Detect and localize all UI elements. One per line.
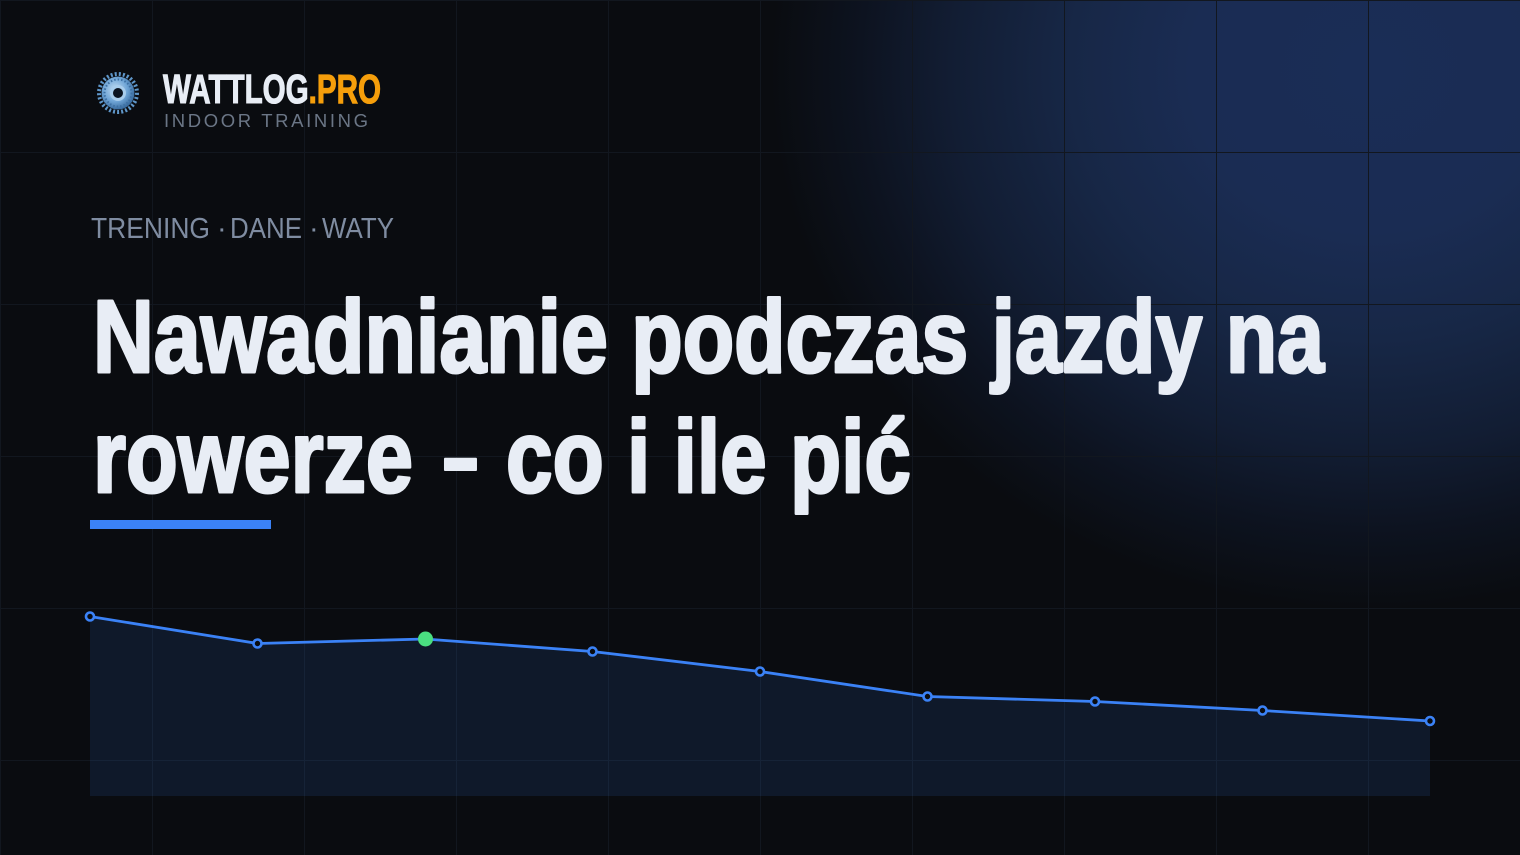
title underline (90, 520, 271, 529)
chart area (90, 616, 1430, 796)
line chart (86, 612, 1434, 796)
icon: cassette sprocket (99, 74, 137, 112)
eyebrow: · (309, 213, 319, 245)
wordmark: WATTLOG.PRO (163, 66, 381, 112)
chart line (90, 616, 1430, 721)
eyebrow (91, 213, 394, 245)
title: rowerze (93, 399, 413, 514)
logo (99, 66, 381, 131)
eyebrow: · (217, 213, 227, 245)
title: – (443, 399, 478, 514)
title: co i ile pić (506, 399, 911, 514)
eyebrow: DANE (230, 213, 302, 245)
chart markers (86, 612, 1434, 725)
highlighted point (418, 632, 433, 646)
eyebrow: TRENING (91, 213, 210, 245)
title (93, 279, 1325, 514)
eyebrow: WATY (322, 213, 394, 245)
tagline: INDOOR TRAINING (164, 110, 368, 131)
background glow (760, 0, 1520, 620)
